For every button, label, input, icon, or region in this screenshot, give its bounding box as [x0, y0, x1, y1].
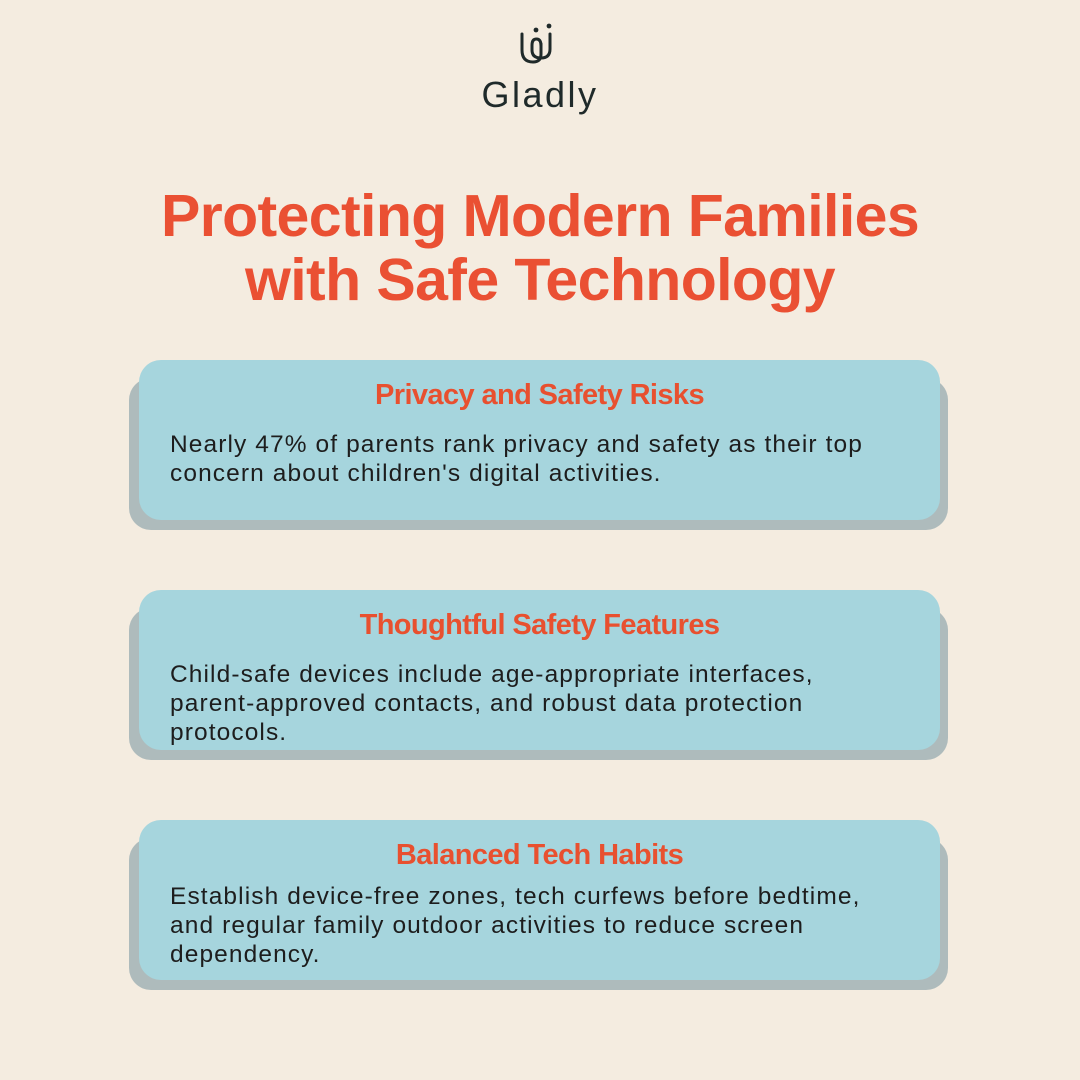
title: Protecting Modern Families: [161, 183, 919, 249]
panel: thoughtful safety features: [129, 590, 948, 760]
heading: Balanced Tech Habits: [396, 839, 683, 871]
heading: Privacy and Safety Risks: [375, 379, 704, 411]
text block: Nearly 47% of parents rank privacy and safety as their top concern about children's digital activities.: [170, 431, 863, 487]
title: with Safe Technology: [245, 247, 835, 313]
text block: Establish device-free zones, tech curfews before bedtime, and regular family outdoor activities to reduce screen dependency.: [170, 883, 860, 968]
icon: logo mark: [520, 24, 552, 64]
logo text: Gladly: [481, 74, 599, 115]
panel: privacy and safety risks: [129, 360, 948, 530]
panel: balanced tech habits: [129, 820, 948, 990]
heading: Thoughtful Safety Features: [360, 609, 719, 641]
logo: [481, 24, 599, 115]
title: [161, 183, 919, 313]
text block: Child-safe devices include age-appropriate interfaces, parent‑approved contacts, and robust data protection protocols.: [170, 661, 814, 746]
